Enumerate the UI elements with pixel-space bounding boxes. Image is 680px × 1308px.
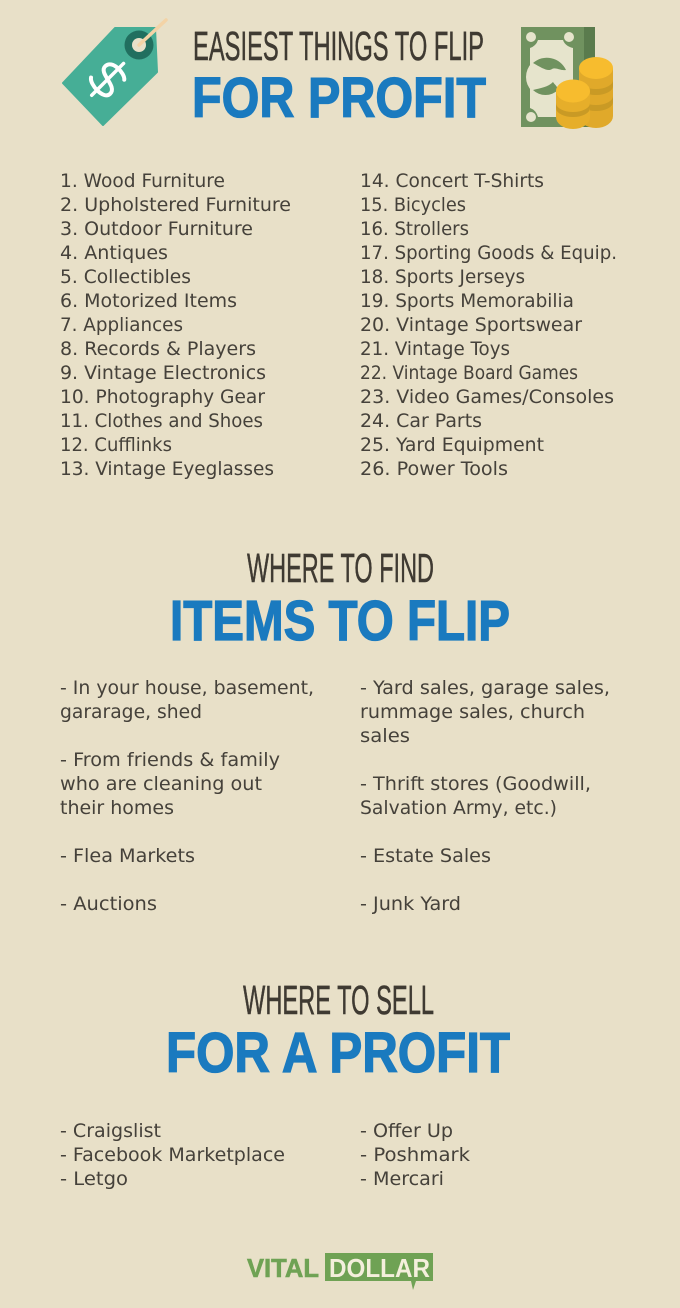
text block: sell left: - Craigslist <box>60 1120 161 1142</box>
icon: price tag <box>63 20 166 125</box>
list: items 14 to 26 <box>360 170 617 480</box>
list: items 14 to 26: 21. Vintage Toys <box>360 338 510 360</box>
list: items 1 to 13: 1. Wood Furniture <box>60 170 225 192</box>
text block: find items left: - In your house, basement, <box>60 677 314 699</box>
title: FOR PROFIT <box>192 66 486 130</box>
list: items 1 to 13: 10. Photography Gear <box>60 386 265 408</box>
text block: find items right: - Estate Sales <box>360 845 491 867</box>
list: items 14 to 26: 24. Car Parts <box>360 410 482 432</box>
text block: sell right: - Offer Up <box>360 1120 453 1142</box>
text block: sell right: - Poshmark <box>360 1144 470 1166</box>
text block: find items left: - Flea Markets <box>60 845 195 867</box>
text block: sell left <box>60 1120 285 1190</box>
text block: find items right: sales <box>360 725 410 747</box>
text block: sell right <box>360 1120 470 1190</box>
list: items 1 to 13: 3. Outdoor Furniture <box>60 218 253 240</box>
title <box>192 23 486 130</box>
text block: find items left <box>60 677 314 915</box>
logo: Vital Dollar: DOLLAR <box>329 1253 430 1283</box>
list: items 14 to 26: 23. Video Games/Consoles <box>360 386 614 408</box>
list: items 1 to 13: 8. Records & Players <box>60 338 256 360</box>
list: items 1 to 13 <box>60 170 291 480</box>
heading: where to find items to flip <box>170 545 510 653</box>
list: items 14 to 26: 22. Vintage Board Games <box>360 362 578 384</box>
list: items 1 to 13: 11. Clothes and Shoes <box>60 410 263 432</box>
heading: where to sell for a profit <box>166 977 510 1085</box>
list: items 14 to 26: 19. Sports Memorabilia <box>360 290 574 312</box>
text block: find items right: - Yard sales, garage sales, <box>360 677 610 699</box>
heading: where to find items to flip: WHERE TO FIND <box>247 545 434 591</box>
list: items 14 to 26: 17. Sporting Goods & Equip. <box>360 242 617 264</box>
text block: find items left: gararage, shed <box>60 701 202 723</box>
list: items 14 to 26: 16. Strollers <box>360 218 469 240</box>
list: items 14 to 26: 25. Yard Equipment <box>360 434 544 456</box>
list: items 14 to 26: 14. Concert T-Shirts <box>360 170 544 192</box>
logo: Vital Dollar <box>247 1253 433 1290</box>
list: items 1 to 13: 9. Vintage Electronics <box>60 362 266 384</box>
list: items 1 to 13: 4. Antiques <box>60 242 168 264</box>
logo: Vital Dollar: VITAL <box>247 1253 319 1283</box>
heading: where to sell for a profit: WHERE TO SELL <box>243 977 434 1023</box>
list: items 1 to 13: 7. Appliances <box>60 314 183 336</box>
text block: sell right: - Mercari <box>360 1168 444 1190</box>
heading: where to find items to flip: ITEMS TO FLIP <box>170 589 510 653</box>
text block: find items right: rummage sales, church <box>360 701 585 723</box>
text block: sell left: - Facebook Marketplace <box>60 1144 285 1166</box>
text block: find items left: - Auctions <box>60 893 157 915</box>
text block: find items left: their homes <box>60 797 174 819</box>
heading: where to sell for a profit: FOR A PROFIT <box>166 1021 510 1085</box>
list: items 14 to 26: 20. Vintage Sportswear <box>360 314 582 336</box>
list: items 1 to 13: 5. Collectibles <box>60 266 191 288</box>
list: items 1 to 13: 2. Upholstered Furniture <box>60 194 291 216</box>
list: items 14 to 26: 15. Bicycles <box>360 194 466 216</box>
text block: find items right: - Thrift stores (Goodwill, <box>360 773 591 795</box>
text block: find items right <box>360 677 610 915</box>
list: items 1 to 13: 13. Vintage Eyeglasses <box>60 458 274 480</box>
list: items 14 to 26: 26. Power Tools <box>360 458 508 480</box>
text block: find items right: Salvation Army, etc.) <box>360 797 557 819</box>
icon: money and coins <box>521 27 613 129</box>
list: items 1 to 13: 6. Motorized Items <box>60 290 237 312</box>
text block: find items right: - Junk Yard <box>360 893 461 915</box>
text block: sell left: - Letgo <box>60 1168 128 1190</box>
list: items 1 to 13: 12. Cufflinks <box>60 434 172 456</box>
list: items 14 to 26: 18. Sports Jerseys <box>360 266 525 288</box>
text block: find items left: who are cleaning out <box>60 773 262 795</box>
text block: find items left: - From friends & family <box>60 749 280 771</box>
